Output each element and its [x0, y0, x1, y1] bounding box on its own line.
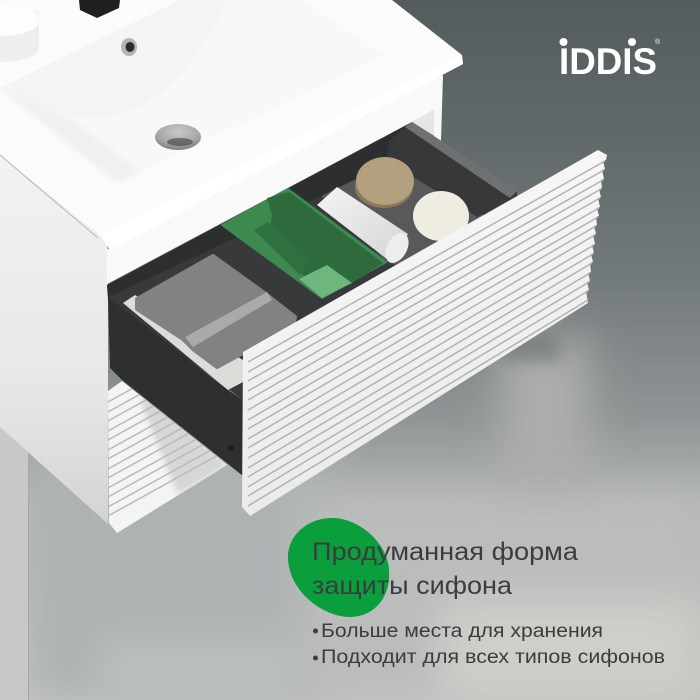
logo: iddis: IDDIS [559, 41, 657, 82]
drawer back wall [107, 125, 407, 297]
white sponge [413, 191, 469, 241]
green blob [288, 518, 389, 617]
heading [312, 538, 578, 600]
lower drawer [108, 381, 227, 533]
bullet list [313, 621, 665, 668]
round sponge [355, 157, 414, 208]
drawer side panel [108, 297, 243, 476]
rolled towel [317, 187, 413, 267]
drawer far wall [385, 122, 518, 217]
drawer floor right compartment [320, 158, 497, 268]
drawer interior [107, 122, 517, 400]
bullet list: Подходит для всех типов сифонов [321, 647, 665, 668]
cabinet right post [412, 75, 443, 141]
white towel [123, 295, 243, 390]
green tray [222, 189, 386, 298]
heading: защиты сифона [312, 572, 512, 600]
vanity cabinet side [0, 155, 108, 524]
countertop with basin [0, 0, 463, 250]
logo: iddis: ® [655, 38, 661, 46]
heading: Продуманная форма [312, 538, 578, 566]
grey towel [137, 256, 295, 367]
cabinet front frame [107, 76, 437, 284]
main drawer front with ribs [242, 150, 607, 516]
bullet list: Больше места для хранения [321, 621, 603, 642]
